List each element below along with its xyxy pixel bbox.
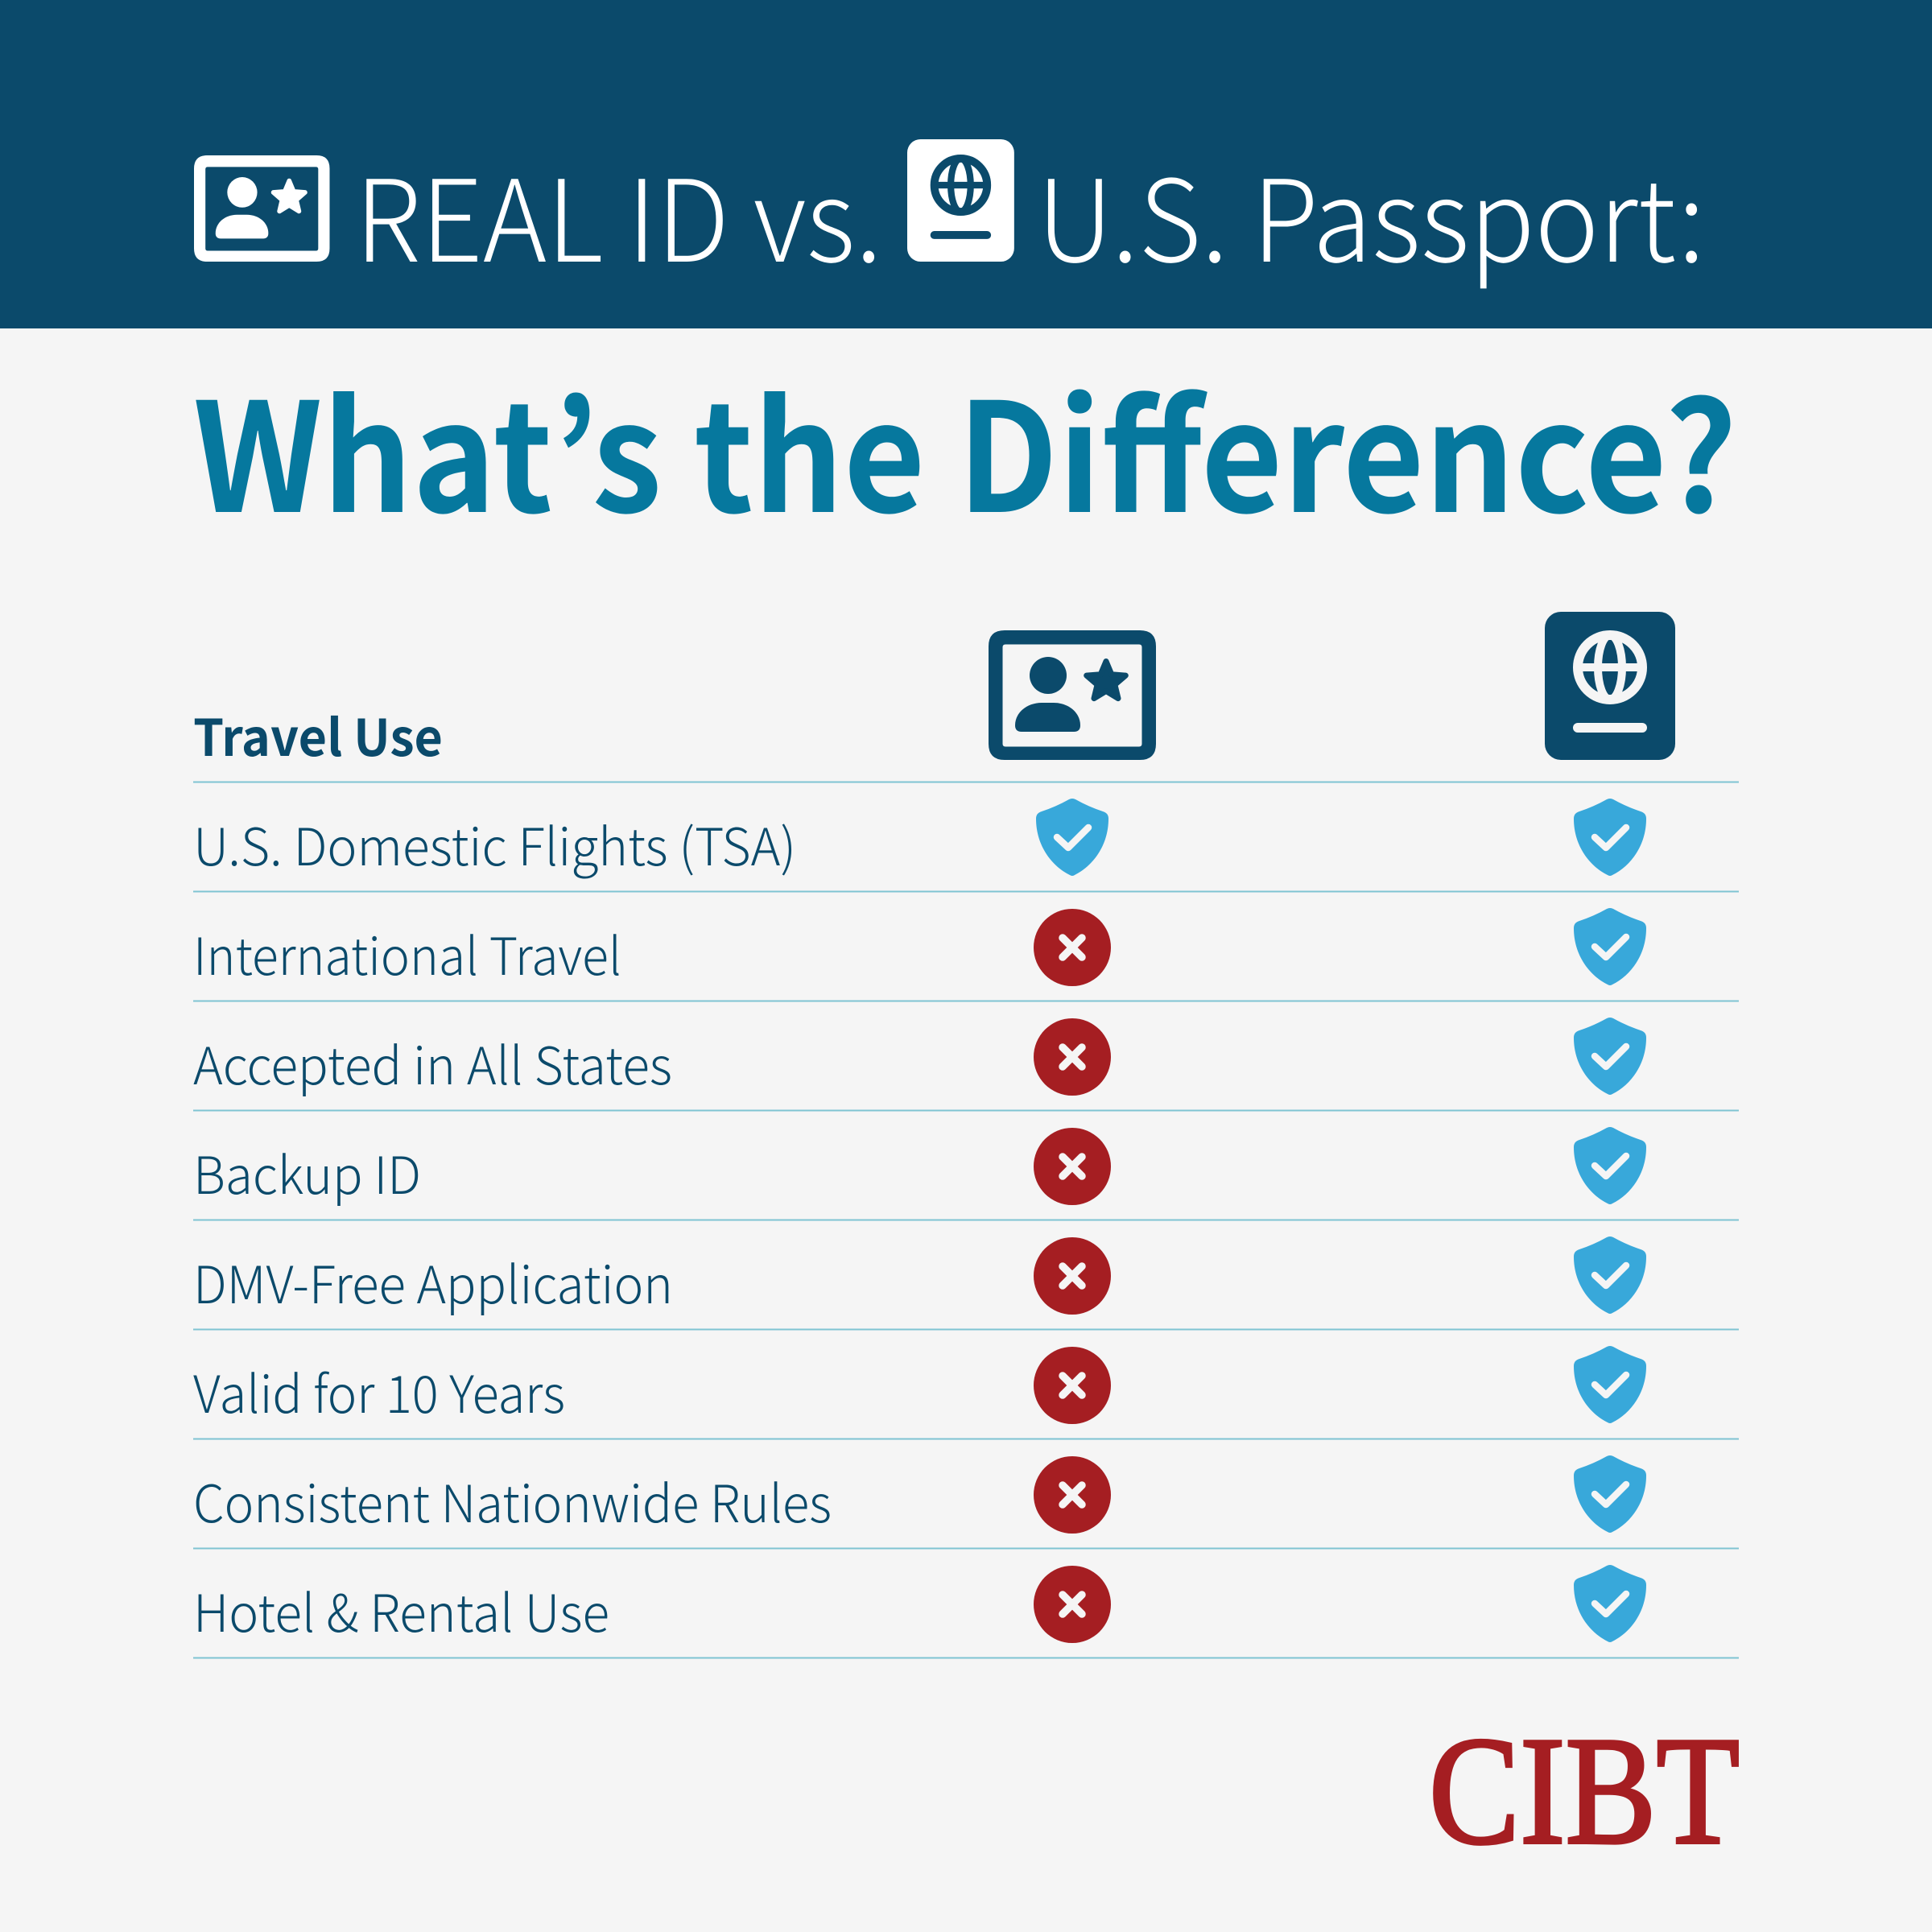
icon: red cross REAL ID [1034,1128,1111,1205]
label: Backup ID [193,1135,421,1209]
icon: REAL ID card [194,155,329,262]
icon: check shield passport [1574,1236,1646,1314]
row 6: Valid for 10 Years [193,1346,1646,1428]
icon: check shield REAL ID [1036,799,1108,876]
title: What’s the Difference? [193,337,1737,556]
row 4: Backup ID [193,1127,1646,1209]
logo: CIBT: CIBT [1429,1705,1740,1876]
label: International Travel [193,916,621,990]
icon: red cross REAL ID [1034,1566,1111,1643]
icon: check shield passport [1574,908,1646,985]
column icon: REAL ID card [989,630,1156,760]
icon: red cross REAL ID [1034,909,1111,986]
label: Consistent Nationwide Rules [193,1463,832,1538]
row 7: Consistent Nationwide Rules [193,1455,1646,1538]
icon: check shield passport [1574,1127,1646,1204]
header text: U.S. Passport:: U.S. Passport: [1037,130,1705,295]
header banner [0,0,1932,328]
row 3: Accepted in All States [193,1018,1646,1100]
row 2: International Travel [193,908,1646,990]
icon: red cross REAL ID [1034,1018,1111,1096]
label: Accepted in All States [193,1026,672,1100]
label: Valid for 10 Years [193,1354,565,1428]
icon: check shield passport [1574,1346,1646,1423]
icon: check shield passport [1574,799,1646,876]
column icon: passport [1545,612,1675,760]
header text: REAL ID vs.: REAL ID vs. [355,130,882,295]
label: Hotel & Rental Use [193,1573,609,1647]
table heading: Travel Use: Travel Use [193,698,443,771]
icon: red cross REAL ID [1034,1347,1111,1424]
icon: check shield passport [1574,1565,1646,1642]
row 1: U.S. Domestic Flights (TSA) [193,799,1646,881]
icon: check shield passport [1574,1455,1646,1533]
label: DMV-Free Application [193,1245,673,1319]
icon: red cross REAL ID [1034,1456,1111,1534]
label: U.S. Domestic Flights (TSA) [193,807,796,881]
row 8: Hotel & Rental Use [193,1565,1646,1647]
icon: check shield passport [1574,1018,1646,1095]
row 5: DMV-Free Application [193,1236,1646,1319]
icon: passport [907,139,1014,262]
icon: red cross REAL ID [1034,1237,1111,1315]
